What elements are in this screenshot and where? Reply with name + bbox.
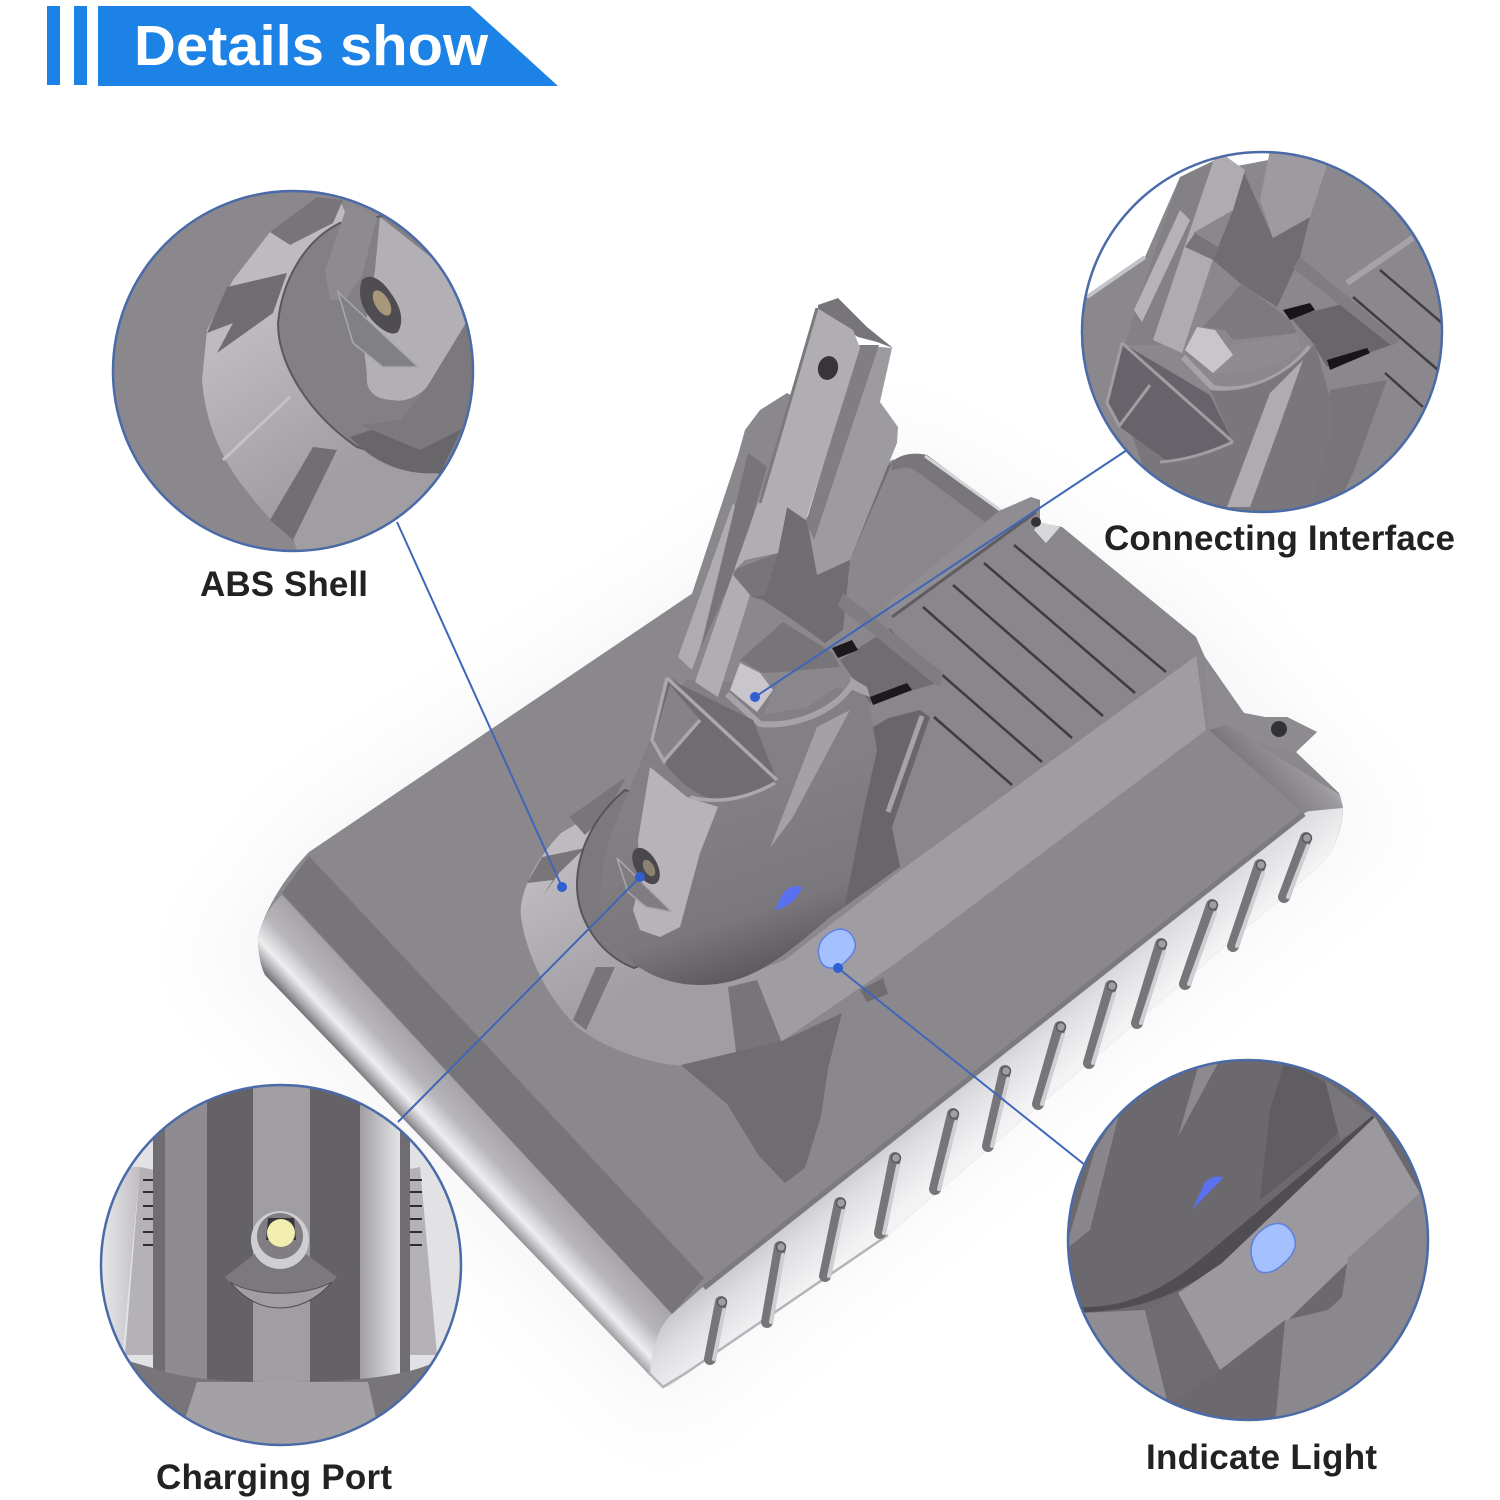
panel: ABS Shell detail — [110, 190, 480, 560]
slots — [1283, 303, 1370, 370]
port fan — [338, 292, 418, 367]
rod shade — [892, 512, 1036, 617]
wedge — [270, 197, 343, 245]
back fin highlight — [678, 503, 745, 670]
right frame interior — [840, 628, 937, 703]
top surface — [1083, 160, 1441, 491]
label: ABS Shell: ABS Shell — [200, 565, 368, 604]
light wedge — [1185, 327, 1233, 373]
rear deck bevel highlight — [925, 456, 1000, 510]
lower centre — [1167, 1293, 1285, 1425]
collar dark band — [350, 429, 462, 474]
neck right highlight — [770, 710, 850, 848]
frame top bar — [1293, 257, 1400, 346]
dark recess — [1260, 1060, 1340, 1200]
stick notch — [733, 553, 778, 597]
under-band shadow — [681, 1013, 842, 1183]
fan dark wedge — [527, 848, 585, 897]
charging port — [626, 843, 666, 889]
column 5 — [360, 1085, 400, 1382]
slot 1 — [832, 640, 858, 658]
frame post — [850, 677, 870, 697]
stem highlight — [364, 217, 466, 401]
fan rib right — [728, 980, 782, 1060]
lower rib — [270, 447, 337, 540]
rib dark — [1145, 1293, 1220, 1405]
right rail — [405, 1167, 437, 1355]
fan rib left — [573, 967, 615, 1030]
lower left — [1065, 1310, 1175, 1425]
dark end band — [282, 856, 704, 1314]
main face — [545, 730, 1300, 1278]
back column — [830, 710, 930, 917]
left window — [654, 685, 700, 762]
circle border — [113, 191, 473, 551]
middle wedge — [207, 273, 287, 353]
left rail — [125, 1167, 155, 1355]
bottom centre — [175, 1382, 383, 1450]
column 1 — [165, 1085, 207, 1382]
panel: Charging Port detail — [90, 1085, 470, 1450]
indicator: small blue light — [775, 886, 802, 910]
label: Indicate Light: Indicate Light — [1146, 1438, 1377, 1477]
side strip edge — [704, 814, 1304, 1288]
port contact — [640, 858, 658, 878]
bottom slope — [90, 1350, 470, 1450]
callout leader: Connecting Interface — [755, 450, 1127, 697]
stem — [325, 203, 377, 300]
small blue light — [1192, 1176, 1223, 1210]
side background — [95, 1085, 470, 1450]
collar — [277, 215, 446, 474]
left frame rim — [652, 678, 777, 800]
stick left edge — [760, 308, 817, 503]
side strip lower edge — [648, 1235, 888, 1387]
stick front face — [695, 308, 860, 697]
fan dark wedge upper — [569, 777, 626, 835]
left stripe — [1065, 1110, 1120, 1250]
button top — [740, 622, 840, 673]
rim — [1183, 347, 1310, 389]
panel: Connecting Interface detail — [1080, 150, 1450, 515]
white base — [1080, 150, 1445, 515]
circle border — [1068, 1060, 1428, 1420]
circle border — [101, 1085, 461, 1445]
tab corner — [1034, 522, 1060, 543]
back fin — [670, 393, 800, 690]
inner recess — [700, 453, 767, 650]
port socket — [626, 843, 666, 889]
band dark rim — [1065, 1116, 1376, 1312]
lower right — [1275, 1193, 1440, 1425]
banner ribbon — [98, 6, 558, 86]
small tab — [1328, 1280, 1342, 1310]
battery illustration — [258, 298, 1343, 1387]
column 2 — [207, 1085, 253, 1382]
neck body — [601, 678, 877, 985]
button lower — [1213, 333, 1300, 373]
stick hole — [815, 354, 841, 382]
fin highlight — [1134, 210, 1190, 322]
button bottom — [763, 667, 843, 715]
banner accent bars — [47, 6, 87, 85]
collar ring — [577, 790, 720, 968]
battery silhouette — [258, 455, 1343, 1387]
left frame rim — [1107, 343, 1233, 462]
stick top cap — [818, 298, 893, 348]
left frame box — [652, 678, 777, 800]
ribbed side strip — [650, 795, 1343, 1387]
button light wedge — [730, 663, 773, 712]
right bevel — [1209, 725, 1343, 812]
port fan — [225, 1252, 337, 1308]
right frame lower bar — [870, 685, 937, 727]
stick upper — [1260, 153, 1327, 238]
small underside tab — [860, 978, 888, 1002]
tab hole — [1031, 517, 1041, 527]
rear tab — [1205, 660, 1317, 752]
panel: Indicate Light detail — [1065, 1055, 1440, 1425]
back column — [1313, 380, 1387, 504]
stem edge — [153, 1085, 410, 1382]
callout leader: Indicate Light — [838, 968, 1085, 1165]
rod — [1347, 238, 1413, 283]
back fin — [1179, 160, 1214, 180]
rear stick behind — [752, 463, 892, 643]
stick — [1153, 150, 1245, 353]
neck highlight — [1227, 360, 1303, 507]
port socket — [360, 277, 401, 334]
light band — [1178, 1117, 1420, 1370]
stick band — [1185, 233, 1218, 260]
back column edge — [888, 716, 922, 812]
wide top band — [745, 656, 1206, 1041]
stick right face — [807, 345, 898, 575]
base — [1065, 1055, 1435, 1425]
port recess — [257, 1213, 303, 1259]
base — [114, 192, 381, 550]
neck highlight strip — [633, 767, 718, 937]
column 3 — [253, 1085, 310, 1382]
rear hole — [1271, 721, 1287, 737]
indicator: charge light window — [818, 929, 855, 968]
circle border — [1082, 152, 1442, 512]
column 4 — [310, 1085, 360, 1382]
port fan — [617, 858, 672, 912]
right frame top bar — [838, 593, 943, 687]
highlight rib — [223, 397, 290, 460]
rear deck bevel — [892, 454, 1000, 522]
label: Connecting Interface: Connecting Interface — [1104, 519, 1455, 558]
left side — [95, 1167, 140, 1348]
callout leader: ABS Shell — [397, 522, 562, 887]
upper right — [1325, 1080, 1375, 1140]
dark centre — [1213, 170, 1310, 307]
title: Details show — [134, 14, 489, 78]
cooling grooves — [923, 545, 1166, 785]
ventilation slots — [710, 834, 1312, 1359]
port ring — [251, 1211, 309, 1269]
title banner — [47, 6, 558, 86]
right shade — [372, 324, 466, 450]
callout anchor dots — [557, 692, 843, 973]
soft product shadow — [200, 430, 1390, 1430]
light window — [1251, 1223, 1295, 1273]
grooves — [1353, 270, 1442, 407]
port lens — [267, 1219, 295, 1247]
port contact — [372, 290, 392, 316]
connector rod — [885, 497, 1040, 617]
left frame — [1107, 343, 1233, 463]
fan — [521, 810, 782, 1066]
end cap highlight — [258, 895, 672, 1376]
label: Charging Port: Charging Port — [156, 1458, 392, 1497]
port dark — [266, 1218, 296, 1240]
rear deck — [850, 455, 1196, 873]
edge highlight — [1087, 257, 1145, 297]
button top — [1203, 283, 1297, 340]
button rim — [727, 683, 853, 724]
slits — [143, 1180, 422, 1245]
fan crescent — [230, 1282, 332, 1308]
upper wedge — [1178, 1060, 1218, 1137]
callout leader: Charging Port — [398, 877, 640, 1122]
fan — [202, 200, 440, 560]
box interior — [1290, 303, 1397, 367]
stick dark edge — [806, 345, 879, 540]
neck — [1130, 343, 1335, 515]
slot 2 — [870, 683, 912, 705]
